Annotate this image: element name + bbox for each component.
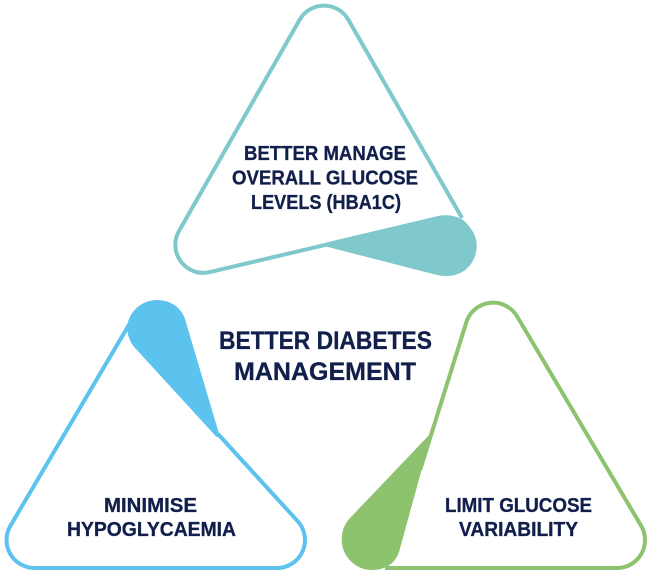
central heading: MANAGEMENT: [234, 358, 416, 386]
green filled corner: [342, 432, 432, 570]
label: minimise hypoglycaemia: HYPOGLYCAEMIA: [67, 519, 236, 541]
label: limit glucose variability: VARIABILITY: [459, 519, 579, 541]
label: minimise hypoglycaemia: [67, 495, 236, 541]
triangle outline: teal: [175, 6, 462, 273]
label: better manage overall glucose levels: LEVELS (HBA1C): [251, 192, 401, 214]
triangle outline: green: [385, 303, 645, 568]
label: limit glucose variability: [445, 495, 592, 541]
label: better manage overall glucose levels: BETTER MANAGE: [244, 143, 406, 165]
panel: limit glucose variability: [342, 303, 645, 570]
blue filled corner: [127, 300, 220, 437]
label: minimise hypoglycaemia: MINIMISE: [104, 495, 197, 517]
label: better manage overall glucose levels: [232, 143, 418, 214]
central heading: [219, 327, 432, 386]
panel: minimise hypoglycaemia: [7, 300, 305, 568]
label: limit glucose variability: LIMIT GLUCOSE: [445, 495, 592, 517]
panel: overall glucose levels: [175, 6, 477, 276]
central heading: BETTER DIABETES: [219, 327, 432, 355]
label: better manage overall glucose levels: OVERALL GLUCOSE: [232, 168, 418, 190]
teal filled corner: [324, 215, 477, 276]
triangle outline: blue: [7, 323, 305, 568]
